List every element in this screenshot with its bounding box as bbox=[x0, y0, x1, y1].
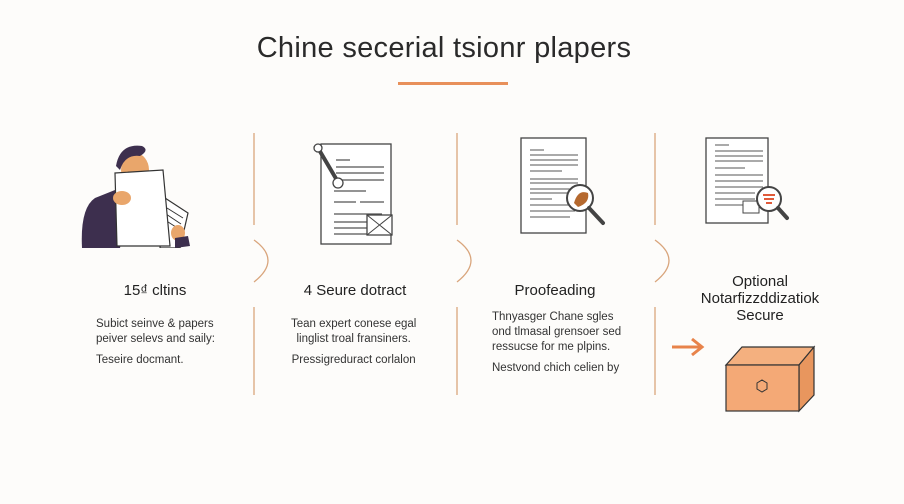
icon: person reading papers bbox=[82, 146, 190, 248]
step 4 heading: Secure bbox=[736, 307, 784, 324]
step 3 text bbox=[492, 311, 621, 374]
step 2 text: Pressigreduract corlalon bbox=[292, 354, 416, 366]
step 1 text: Teseire docmant. bbox=[96, 354, 184, 366]
step 3 text: Nestvond chich celien by bbox=[492, 362, 619, 374]
step 2 text: linglist troal fransiners. bbox=[296, 333, 411, 345]
step 1 text: peiver selevs and saily: bbox=[96, 333, 215, 345]
step 1 text bbox=[96, 318, 215, 366]
step 2 text: Tean expert conese egal bbox=[291, 318, 416, 330]
icon: document with pin bbox=[313, 143, 393, 245]
step 3 text: Thnyasger Chane sgles bbox=[492, 311, 613, 323]
step 1 heading: 15₫ cltins bbox=[124, 282, 186, 299]
title: Chine secerial tsionr plapers bbox=[257, 32, 631, 64]
step 3 text: ressucse for me plpins. bbox=[492, 341, 610, 353]
icon: document with red-stamp magnifier bbox=[705, 137, 790, 224]
step 2 text bbox=[291, 318, 416, 366]
icon: document with magnifier bbox=[520, 137, 606, 234]
title underline bbox=[398, 82, 508, 85]
step 3 text: ond tlmasal grensoer sed bbox=[492, 326, 621, 338]
step 4 heading: Optional bbox=[732, 273, 788, 290]
arrow bbox=[672, 338, 704, 356]
step 2 heading: 4 Seure dotract bbox=[304, 282, 406, 299]
icon: box bbox=[724, 346, 816, 412]
step 4 heading bbox=[701, 273, 820, 324]
step 4 heading: Notarfizzddizatiok bbox=[701, 290, 819, 307]
step 1 text: Subict seinve & papers bbox=[96, 318, 214, 330]
step 3 heading: Proofeading bbox=[515, 282, 595, 299]
